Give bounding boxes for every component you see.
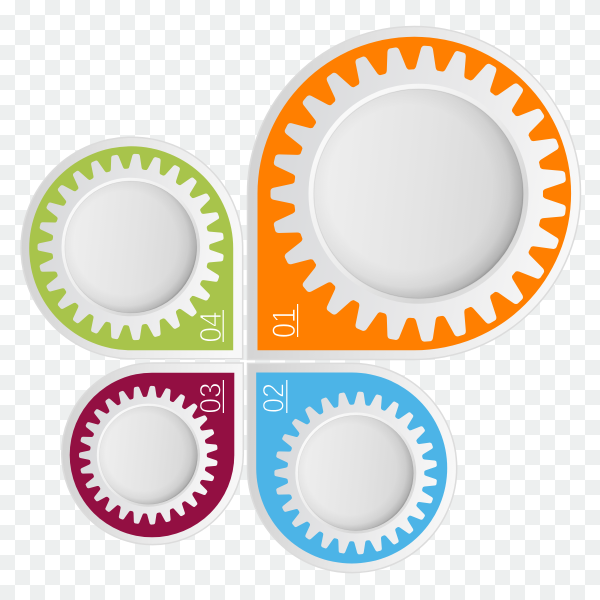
underline 01 <box>297 304 298 337</box>
panel: 04 green gear <box>21 137 243 359</box>
panel: 01 orange gear <box>248 27 580 360</box>
panel 04 outer bezel <box>21 137 243 359</box>
gear 04 <box>36 152 225 342</box>
panel 01 outer bezel <box>248 27 580 360</box>
underline 03 <box>223 380 224 413</box>
panel 03 outer bezel <box>62 363 243 545</box>
number 03: 03 <box>195 382 228 414</box>
gear 01 <box>268 44 568 344</box>
panel: 02 blue gear <box>248 363 457 573</box>
gear 03 <box>78 385 219 526</box>
underline 02 <box>286 380 287 413</box>
panel 03 crimson teardrop <box>70 373 234 537</box>
panel: 03 crimson gear <box>62 363 243 545</box>
underline 04 <box>223 310 224 342</box>
number 02: 02 <box>257 383 290 413</box>
panel 04 green teardrop <box>29 146 233 350</box>
panel 02 blue teardrop <box>256 372 447 564</box>
panel 02 outer bezel <box>248 363 457 573</box>
gear 02 <box>273 390 438 556</box>
panel 01 orange teardrop <box>258 37 571 350</box>
number 01: 01 <box>266 308 302 338</box>
number 04: 04 <box>193 312 228 342</box>
